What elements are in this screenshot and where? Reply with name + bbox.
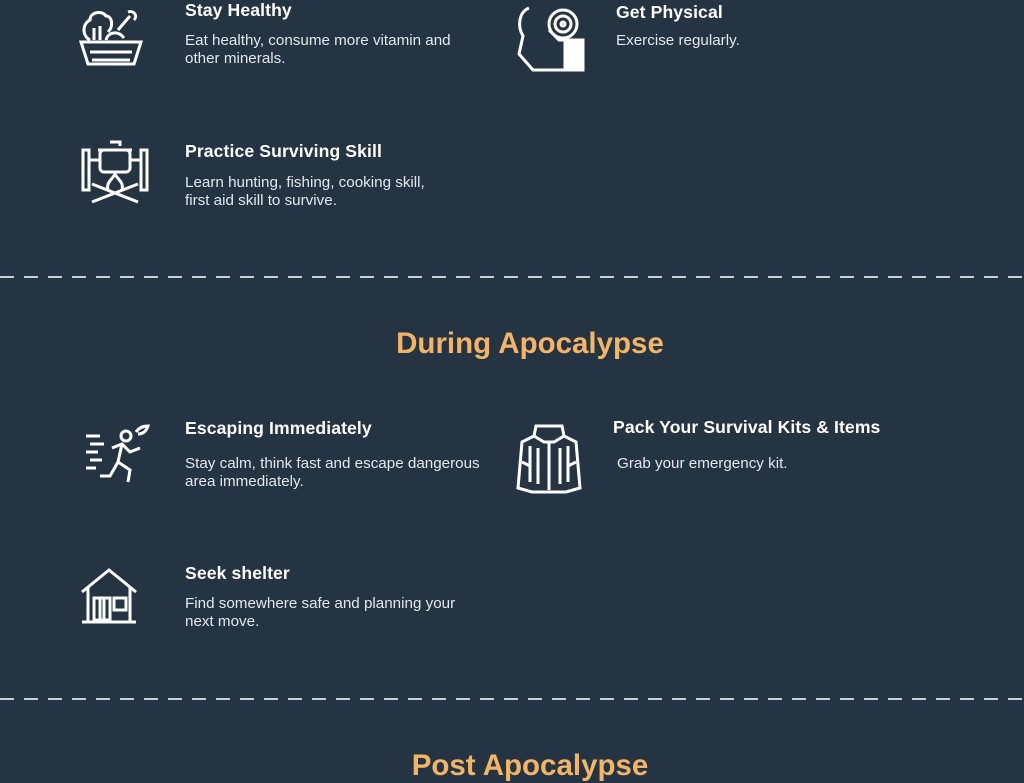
- icon: house shelter: [81, 568, 137, 624]
- heading: During Apocalypse: During Apocalypse: [396, 327, 664, 360]
- text: Practice body: Learn hunting, fishing, cooking skill,: [185, 174, 425, 191]
- text: Practice body: first aid skill to survive.: [185, 192, 337, 209]
- text: Get Physical body: Exercise regularly.: [616, 32, 740, 49]
- text: Seek shelter body: next move.: [185, 613, 259, 630]
- text: Seek shelter body: [185, 595, 455, 630]
- icon: vegetable basket: [79, 10, 143, 66]
- heading: Stay Healthy: Stay Healthy: [185, 0, 292, 20]
- heading: Seek shelter: Seek shelter: [185, 563, 290, 583]
- text: Stay Healthy body: other minerals.: [185, 50, 285, 67]
- text: Escaping body: Stay calm, think fast and escape dangerous: [185, 455, 480, 472]
- text: Pack body: Grab your emergency kit.: [617, 455, 788, 472]
- text: Stay Healthy body: [185, 32, 451, 67]
- heading: Practice Surviving Skill: Practice Surviving Skill: [185, 141, 382, 161]
- heading: Escaping Immediately: Escaping Immediately: [185, 418, 372, 438]
- text: Escaping body: area immediately.: [185, 473, 304, 490]
- text: Seek shelter body: Find somewhere safe and planning your: [185, 595, 455, 612]
- icon: running person: [86, 424, 150, 482]
- heading: Pack Your Survival Kits & Items: Pack Your Survival Kits & Items: [613, 417, 880, 437]
- icon: muscle arm: [517, 6, 584, 72]
- text: Stay Healthy body: Eat healthy, consume more vitamin and: [185, 32, 451, 49]
- icon: campfire pot: [82, 140, 148, 204]
- heading: Post Apocalypse: Post Apocalypse: [412, 749, 648, 782]
- heading: Get Physical: Get Physical: [616, 2, 723, 22]
- icon: jacket: [516, 424, 582, 494]
- text: Practice body: [185, 174, 425, 209]
- text: Escaping body: [185, 455, 480, 490]
